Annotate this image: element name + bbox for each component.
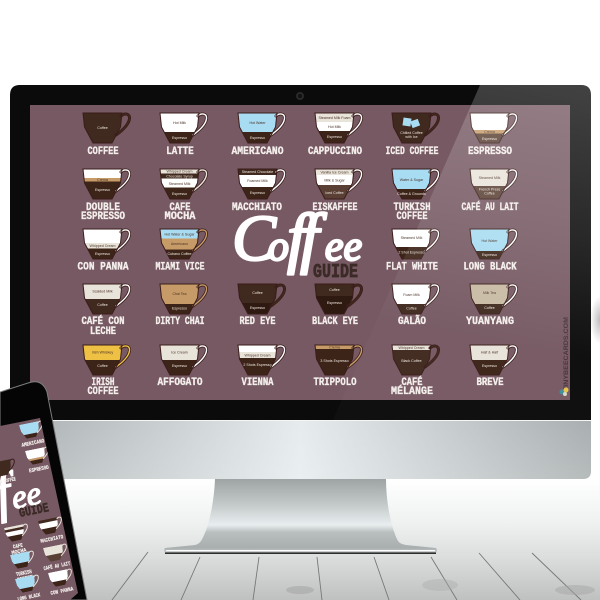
label: GALÃO [398,314,426,328]
cup: Foamed Milk [247,179,268,183]
cup: Hot Water [481,239,498,243]
cup: Espresso [172,364,187,368]
label: LATTE [166,146,194,158]
drink: Yuanyang [466,284,517,328]
cup: Coffee & Grounds [397,192,426,196]
label: COFFEE [396,211,428,223]
label [394,202,430,223]
cup: Chocolate Syrup [166,174,193,178]
label: CAFÉ [402,375,423,389]
label [81,202,125,223]
label: COFFEE [88,146,119,158]
cup: Coffee [97,126,108,130]
phone drink: Espresso: ESPRESSO [28,464,50,475]
screen [30,105,570,400]
cup: Scalded Milk [92,290,113,294]
cup: Coffee [484,192,495,196]
label: ESPRESSO [468,146,512,158]
phone drink: Macchiato [37,516,66,545]
label: MACCHIATO [232,202,282,214]
drink: Galao [392,284,439,328]
cup: Coffee [252,291,263,295]
cup [392,345,439,375]
cup [83,229,130,260]
cup [315,284,362,314]
guide subtitle: GUIDE [313,261,358,283]
cup: Ice Cream [171,350,188,354]
cup: Steamed Chocolate [242,170,273,174]
wall shadow [590,296,600,344]
phone drink: Long Black [14,574,43,600]
cup: Whipped Cream [399,346,424,350]
cup: Espresso [327,301,342,305]
cup [470,113,517,144]
cup [83,345,130,375]
cup: Chilled Coffee [400,131,423,135]
cup: Black Coffee [401,359,422,363]
phone drink: Cafe au Lait: CAFÉ AU LAIT [43,560,71,572]
cup: Crema [484,130,495,134]
label: MOCHA [164,211,196,223]
drink: Eiskaffee [312,169,362,214]
cup: Hot Water [249,121,266,125]
phone body [0,382,87,600]
drink: Vienna [238,345,285,389]
cup: Espresso [250,191,265,195]
cup: Iced Coffee [325,191,344,195]
drink: Turkish Coffee [392,169,439,223]
cup [238,113,285,143]
phone drink: Americano [18,420,47,449]
cup: Americano [171,242,188,246]
cup [160,345,207,375]
label: FLAT WHITE [386,262,438,274]
cup: Hot Milk [328,125,341,129]
drink: Latte [160,113,207,158]
label: DOUBLE [86,202,120,214]
drink: Breve [470,345,517,389]
drink: Iced Coffee [386,113,439,158]
phone drink: Turkish Coffee [10,550,39,584]
phone drink: Espresso [25,446,53,475]
monitor stand [164,479,437,554]
cup: Coffee [97,303,108,307]
cup: 2 Shot Espresso [398,250,425,254]
cup: Espresso [172,192,187,196]
cup [83,169,130,200]
cup: Espresso [482,253,497,257]
drink: Irish Coffee [83,345,130,398]
cup [392,113,439,143]
cup: Milk Tea [483,291,496,295]
label: CAPPUCCINO [308,146,362,158]
cup [315,169,362,199]
cup: Espresso [95,188,110,192]
label: BREVE [476,377,504,389]
cup: Espresso [250,306,265,310]
phone drink: Cafe Mocha [4,523,33,557]
cup [315,345,362,375]
drink: Coffee [83,113,130,158]
cup: Espresso [327,135,342,139]
drink: Espresso [468,113,517,158]
cup: Crema [329,345,340,349]
cup: Steamed Milk [169,182,191,186]
label: ESPRESSO [81,211,125,223]
drink: Macchiato [232,169,285,214]
phone mockup [0,382,87,600]
cup: 2 Shots Espresso [243,363,272,367]
cup: Espresso [250,136,265,140]
cup: Milk & Sugar [324,178,345,182]
cup [315,113,362,143]
cup [238,284,285,314]
script wordmark: Coffee [232,199,362,275]
drink: Double Espresso [81,169,130,223]
cup: Cubano Coffee [167,252,192,256]
cup: Half & Half [481,350,498,354]
phone screen content [0,420,76,600]
drink: Black Eye [312,284,362,328]
cup: Crema [97,178,108,182]
cup: Water & Sugar [400,178,424,182]
label: COFFEE [88,386,119,398]
label: CAFÉ CON [82,314,124,328]
label [391,375,433,398]
label: CAFÉ AU LAIT [462,200,519,214]
cup: Vanilla Ice Cream [320,170,349,174]
monitor bezel [10,85,591,420]
cup: 3 Shots Espresso [320,359,349,363]
label: BLACK EYE [312,316,358,328]
cup: Espresso [95,252,110,256]
monitor camera [296,92,304,100]
label: MIAMI VICE [156,262,205,274]
drink: Cappuccino [308,113,362,158]
drink: Cafe Melange [391,345,439,398]
cup [470,169,517,199]
website credit: TINYBEECARDS.COM [563,317,570,391]
screen glare [333,85,591,420]
label: RED EYE [240,316,276,328]
cup: French Press [479,188,500,192]
cup [160,229,207,260]
cup: Steamed Milk [401,236,423,240]
cup: with Ice [405,135,418,139]
phone screen [0,418,78,600]
phone drink: Con Panna [47,568,76,597]
label [82,314,124,338]
cup: Steamed Milk [479,176,501,180]
drink: Cafe au Lait [462,169,519,214]
label: VIENNA [242,377,274,389]
label: LECHE [90,326,116,338]
phone drink: Americano: AMERICANO [21,437,45,449]
drink: Cafe con Leche [82,284,130,338]
cup: Chai Tea [172,292,187,296]
label: CON PANNA [78,262,129,274]
cup: Foam Milk [403,293,420,297]
phone drink: Turkish Coffee: TURKISH [15,568,32,578]
cup: Hot Milk [173,121,186,125]
label: ICED COFFEE [386,146,439,158]
cup [160,113,207,143]
phone drink: Iced Coffee [0,458,19,487]
phone drink: Cafe au Lait [40,543,71,572]
label: MÉLANGE [391,384,433,398]
phone drink: Turkish Coffee: COFFEE [16,573,34,584]
label: TURKISH [394,202,430,214]
cup [160,169,207,200]
cup: Espresso [482,364,497,368]
drink: Trippolo [314,345,362,389]
cup: Irish Whiskey [92,350,113,354]
icon: logo [560,388,568,396]
cup: Coffee [97,364,108,368]
phone drink: Cafe Mocha: CAFE [12,542,24,551]
drink: Dirty Chai [156,284,207,328]
phone drink: Con Panna: CON PANNA [50,585,74,597]
drink: Long Black [464,229,517,274]
phone drink: Cafe Mocha: MOCHA [11,546,28,556]
cup [392,169,439,199]
cup [160,284,207,314]
cup [83,284,130,314]
drink: Red Eye [238,284,285,328]
phone title: GUIDE [18,500,50,521]
label: AFFOGATO [158,377,203,389]
cup: Coffee [484,306,495,310]
label: LONG BLACK [464,262,517,274]
monitor chin [10,420,591,479]
label: IRISH [92,377,114,389]
cup [470,284,517,314]
phone drink: Macchiato: MACCHIATO [40,533,64,545]
floor [0,479,600,600]
drink: Flat White [386,229,439,274]
cup: Steamed Milk Foam [319,116,350,120]
cup [238,345,285,375]
label [88,377,119,398]
cup: Espresso [482,137,497,141]
cup: Coffee [406,306,417,310]
cup: Coffee [329,288,340,292]
label: AMERICANO [232,146,284,158]
cup: Whipped Cream [245,354,270,358]
cup [392,284,439,314]
label: CAFE [170,202,191,214]
drink: Americano [232,113,285,158]
drink: Affogato [158,345,207,389]
cup [470,345,517,375]
title: Coffee Guide [232,199,362,283]
cup [392,229,439,259]
cup: Espresso [172,136,187,140]
label [164,202,196,223]
label: YUANYANG [466,316,514,328]
drink: Cafe Mocha [160,169,207,223]
drink: Miami Vice [156,229,207,274]
label: EISKAFFEE [312,202,358,214]
label: DIRTY CHAI [156,316,204,328]
cup: Hot Water & Sugar [164,232,195,236]
cup: Espresso [172,306,187,310]
cup [238,169,285,199]
cup: Whipped Cream [90,244,115,248]
cup [470,229,517,259]
drink: Con Panna [78,229,130,274]
label: TRIPPOLO [314,377,357,389]
cup: Whipped Cream [167,170,192,174]
